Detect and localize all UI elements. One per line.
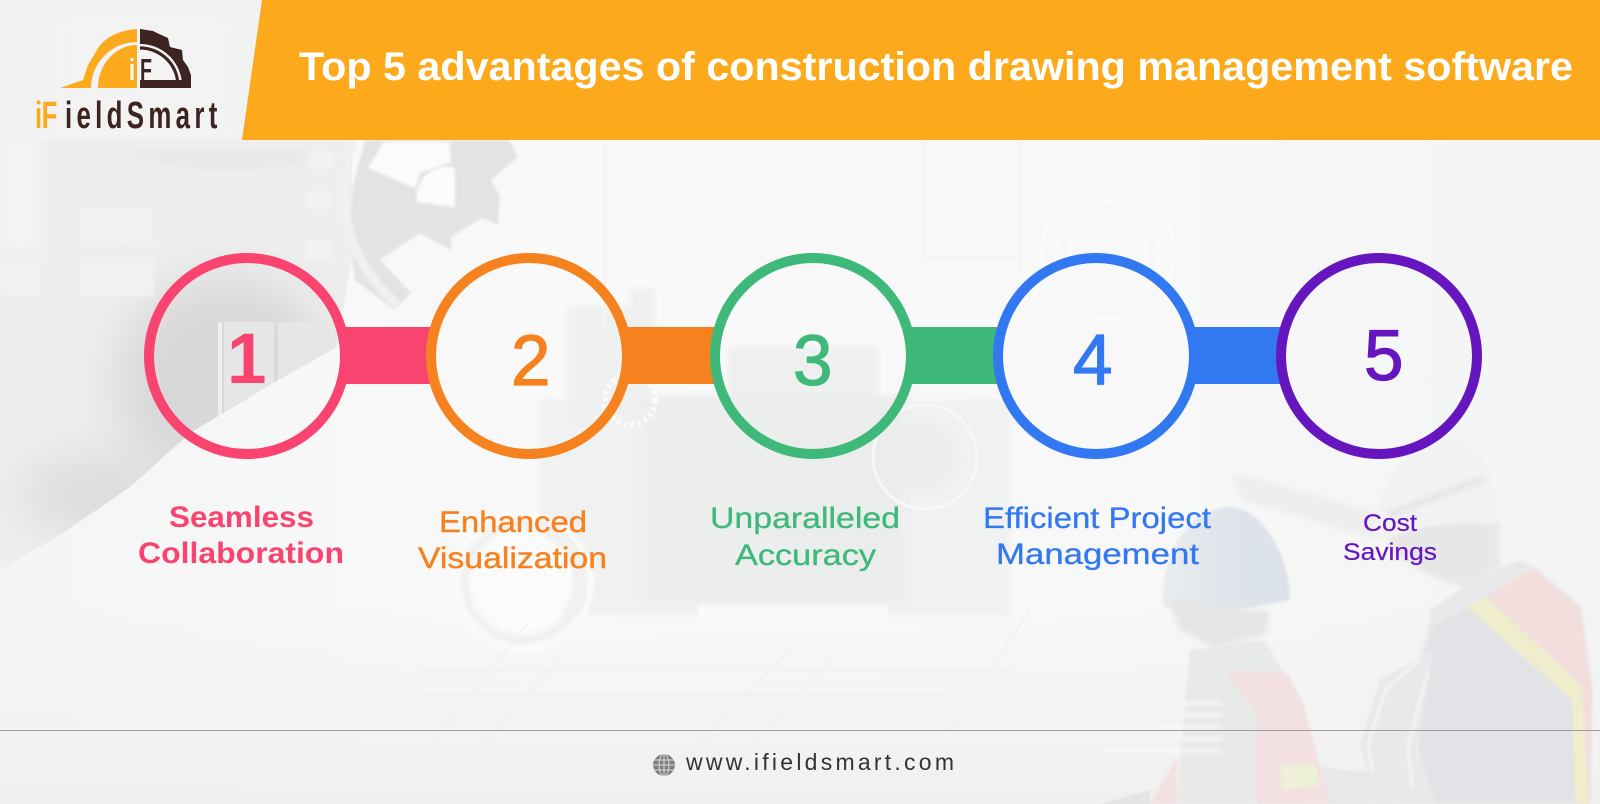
- label 2: [418, 506, 607, 575]
- ring 3: [715, 258, 911, 454]
- label 5: Cost: [1363, 510, 1417, 537]
- gear illustration: [306, 140, 518, 310]
- label 4: Management: [996, 538, 1200, 571]
- label 2: Visualization: [418, 542, 607, 575]
- label 1: [138, 501, 344, 570]
- footer website: www.ifieldsmart.com: [685, 749, 954, 775]
- label 3: Unparalleled: [710, 502, 900, 535]
- number 4: 4: [1073, 321, 1112, 400]
- label 3: [710, 502, 900, 572]
- hand silhouette: [0, 130, 360, 580]
- blueprint lines: [415, 610, 1030, 804]
- label 5: Savings: [1343, 539, 1437, 566]
- label 2: Enhanced: [439, 506, 587, 539]
- logo monogram: i: [129, 52, 135, 87]
- number 5: 5: [1364, 317, 1404, 396]
- ring 1: [149, 258, 345, 454]
- icon: globe: [653, 754, 675, 776]
- connector bar 1 to 2: [342, 327, 434, 384]
- step 1: [138, 258, 345, 570]
- city buildings: [540, 288, 1010, 615]
- dial circles: [455, 187, 1174, 650]
- step 5: [1281, 258, 1477, 566]
- logo gear: [140, 29, 191, 88]
- number 2: 2: [511, 322, 550, 401]
- step 2: [418, 258, 627, 575]
- label 3: Accuracy: [735, 539, 876, 572]
- header banner: [242, 0, 1600, 140]
- number 1: 1: [227, 320, 266, 399]
- label 4: [983, 502, 1212, 571]
- left worker: [1100, 507, 1330, 804]
- logo monogram: [129, 52, 152, 87]
- label 4: Efficient Project: [983, 502, 1212, 535]
- ring 2: [431, 258, 627, 454]
- logo: iFieldSmart: [35, 29, 217, 136]
- step 3: [710, 258, 911, 572]
- label 5: [1343, 510, 1437, 566]
- label 1: Seamless: [169, 501, 314, 534]
- connector bar 4 to 5: [1191, 327, 1282, 384]
- logo monogram: F: [140, 52, 152, 87]
- step 4: [983, 258, 1212, 571]
- connector bar 3 to 4: [908, 327, 999, 384]
- label 1: Collaboration: [138, 537, 344, 570]
- right worker: [1230, 442, 1592, 804]
- ring 5: [1281, 258, 1477, 454]
- connector bar 2 to 3: [624, 327, 716, 384]
- title: Top 5 advantages of construction drawing management software: [299, 45, 1573, 89]
- logo wordmark: iF: [35, 94, 57, 136]
- logo wordmark: ieldSmart: [65, 94, 217, 136]
- number 3: 3: [793, 322, 832, 401]
- ring 4: [998, 258, 1194, 454]
- billboard strip: [698, 605, 888, 620]
- footer divider: [0, 730, 1600, 731]
- logo helmet: [60, 29, 137, 88]
